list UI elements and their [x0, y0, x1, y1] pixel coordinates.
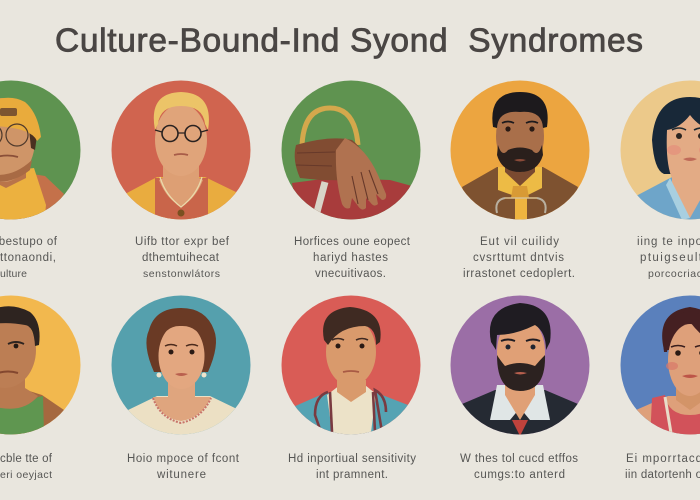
caption: Eut vil cuilidy — [480, 236, 559, 248]
portrait: short-haired woman on blue — [620, 295, 700, 440]
panel: person 10 — [620, 295, 700, 481]
panel: person 5 — [620, 80, 700, 280]
caption: Ei mporrtacd — [626, 453, 700, 465]
caption: hariyd hastes — [313, 252, 388, 264]
caption: Hoio mpoce of fcont — [127, 453, 240, 465]
caption: dthemtuihecat — [142, 252, 220, 264]
portrait: blond man with glasses on red — [110, 80, 252, 225]
caption: ulture — [0, 268, 27, 280]
caption — [463, 236, 575, 280]
panel: person 7 — [110, 295, 252, 481]
caption: cble tte of — [0, 453, 53, 465]
caption — [294, 236, 411, 280]
panel: person 1 — [0, 80, 82, 280]
panel: person 2 — [110, 80, 252, 280]
portrait: hands holding a rope on green — [280, 80, 422, 225]
caption: senstonwlátors — [143, 268, 220, 280]
title: Culture-Bound-Ind Syond Syndromes — [55, 22, 643, 60]
caption — [637, 236, 700, 280]
caption: eri oeyjact — [0, 469, 52, 481]
caption: vnecuitivaos. — [315, 268, 386, 280]
caption — [0, 453, 53, 481]
caption — [135, 236, 230, 280]
portrait: man in green tank top on yellow — [0, 295, 82, 440]
portrait: bearded man in dark jacket on purple — [450, 295, 592, 440]
caption: witunere — [156, 469, 206, 481]
portrait: woman with necklace on teal — [110, 295, 252, 440]
caption: ttonaondi, — [0, 252, 56, 264]
portrait: man with stethoscope on red — [280, 295, 422, 440]
panel: person 4 — [450, 80, 592, 280]
portrait: woman with dark hair on sand — [620, 80, 700, 225]
caption: Uifb ttor expr bef — [135, 236, 230, 248]
caption — [127, 453, 240, 481]
caption: Hd inportiual sensitivity — [288, 453, 416, 465]
caption: irrastonet cedoplert. — [463, 268, 575, 280]
caption: int pramnent. — [316, 469, 388, 481]
caption: Horfices oune eopect — [294, 236, 411, 248]
panel: person 3 — [280, 80, 422, 280]
caption: iin datortenh o — [625, 469, 700, 481]
caption — [460, 453, 578, 481]
panel: person 9 — [450, 295, 592, 481]
caption — [288, 453, 416, 481]
caption: cvsrttumt dntvis — [473, 252, 564, 264]
portrait: man in yellow cap on green — [0, 80, 82, 225]
caption: W thes tol cucd etffos — [460, 453, 578, 465]
caption — [0, 236, 58, 280]
caption — [625, 453, 700, 481]
panel: person 8 — [280, 295, 422, 481]
panel: person 6 — [0, 295, 82, 481]
portrait: bearded man in brown jacket on orange — [450, 80, 592, 225]
caption: cumgs:to anterd — [474, 469, 565, 481]
